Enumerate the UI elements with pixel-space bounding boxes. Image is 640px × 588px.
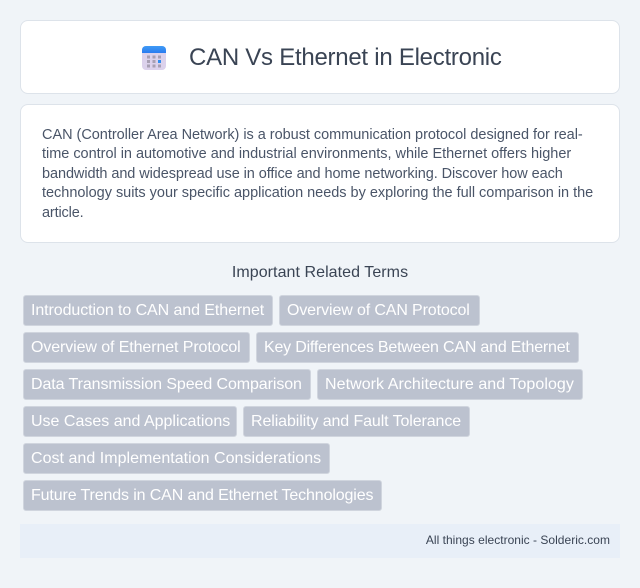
tag bbox=[279, 295, 480, 326]
intro text panel: time control in automotive and industrial environments, while Ethernet offers higher bbox=[42, 146, 571, 162]
tag: Network Architecture and Topology bbox=[325, 376, 574, 393]
intro text panel bbox=[20, 104, 620, 243]
icon: calendar bbox=[142, 46, 166, 70]
tag: Reliability and Fault Tolerance bbox=[251, 413, 461, 430]
tag: Data Transmission Speed Comparison bbox=[31, 376, 302, 393]
tag: Overview of Ethernet Protocol bbox=[31, 339, 241, 356]
tag bbox=[23, 443, 330, 474]
intro text panel: article. bbox=[42, 205, 84, 221]
tag bbox=[317, 369, 583, 400]
tag: Key Differences Between CAN and Ethernet bbox=[264, 339, 570, 356]
intro text panel: bandwidth and widespread use in office and home networking. Discover how each bbox=[42, 166, 563, 182]
tag: Introduction to CAN and Ethernet bbox=[31, 302, 264, 319]
tag bbox=[23, 406, 237, 437]
footer bar: All things electronic - Solderic.com bbox=[426, 533, 610, 547]
tag: Cost and Implementation Considerations bbox=[31, 450, 321, 467]
related terms heading: Important Related Terms bbox=[232, 264, 408, 281]
tag bbox=[23, 480, 382, 511]
tag: Future Trends in CAN and Ethernet Technologies bbox=[31, 487, 373, 504]
tag bbox=[243, 406, 470, 437]
title: CAN Vs Ethernet in Electronic bbox=[189, 44, 502, 71]
tag: Overview of CAN Protocol bbox=[287, 302, 470, 319]
header card bbox=[20, 20, 620, 94]
tag bbox=[23, 295, 273, 326]
related terms tags bbox=[23, 295, 583, 511]
tag bbox=[23, 369, 311, 400]
intro text panel: CAN (Controller Area Network) is a robust communication protocol designed for real- bbox=[42, 127, 583, 143]
tag bbox=[23, 332, 250, 363]
tag bbox=[256, 332, 579, 363]
intro text panel: technology suits your specific application needs by exploring the full comparison in the bbox=[42, 185, 593, 201]
footer bar bbox=[20, 524, 620, 558]
tag: Use Cases and Applications bbox=[31, 413, 230, 430]
